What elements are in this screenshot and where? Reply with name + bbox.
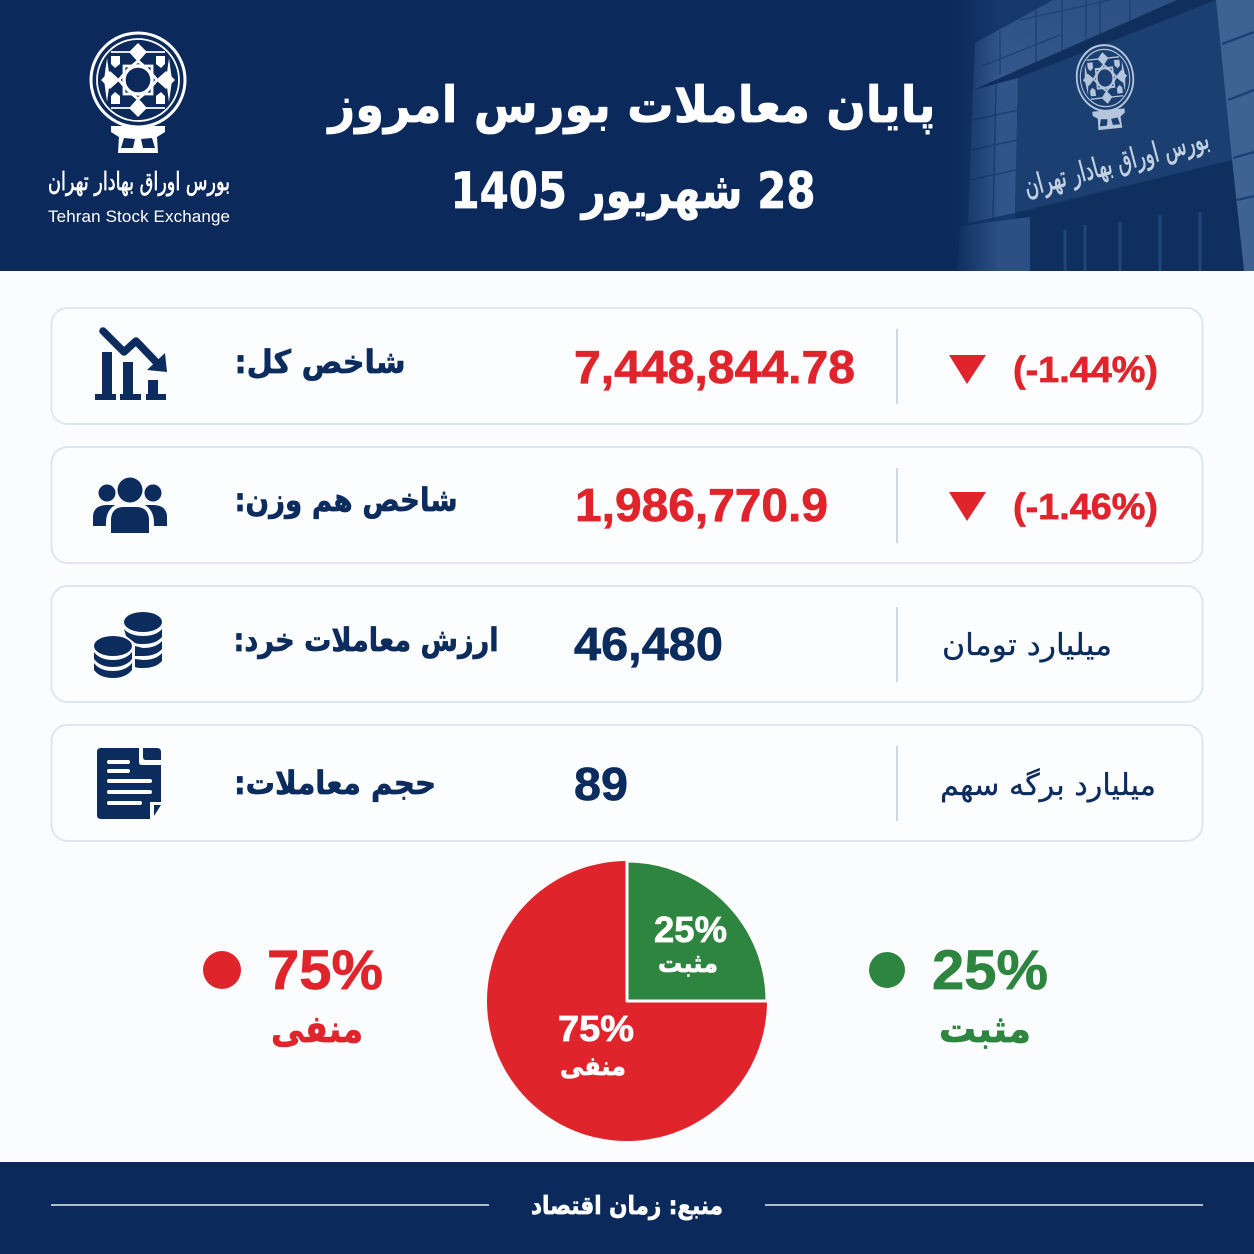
row: trade volume <box>52 725 1202 841</box>
row: retail trade value <box>52 586 1202 702</box>
value: 46,480 <box>574 618 723 670</box>
pie label negative: 75% <box>558 1008 634 1049</box>
pie label positive: 25% <box>654 909 727 950</box>
legend: negative: منفی <box>271 1007 363 1051</box>
pie label positive <box>654 909 727 979</box>
icon: document <box>97 748 161 819</box>
building sign logo <box>1074 42 1138 132</box>
legend: positive: مثبت <box>939 1007 1031 1051</box>
legend: positive <box>869 938 1048 1051</box>
label: حجم معاملات: <box>234 764 436 802</box>
pie label negative <box>558 1008 634 1082</box>
logo: Tehran Stock Exchange: بورس اوراق بهادار تهران <box>48 167 230 197</box>
legend: negative: 75% <box>267 938 383 1001</box>
change percent: (-1.46%) <box>1013 486 1158 527</box>
legend: positive: 25% <box>932 938 1048 1001</box>
down triangle <box>949 492 986 521</box>
title: پایان معاملات بورس امروز <box>326 76 936 135</box>
logo: Tehran Stock Exchange <box>48 33 230 226</box>
pie label positive: مثبت <box>658 949 718 979</box>
title: 28 شهریور 1405 <box>451 162 816 221</box>
label: شاخص کل: <box>234 343 406 381</box>
header band <box>0 0 1254 271</box>
row: total index <box>52 308 1202 424</box>
logo: Tehran Stock Exchange: Tehran Stock Exchange <box>48 207 230 226</box>
building photo <box>950 0 1254 271</box>
unit: میلیارد برگه سهم <box>940 768 1156 803</box>
row: equal weight index <box>52 447 1202 563</box>
value: 1,986,770.9 <box>575 479 828 531</box>
source: منبع: زمان اقتصاد <box>531 1191 723 1221</box>
footer band <box>0 1162 1254 1254</box>
icon: coins <box>94 612 162 678</box>
icon: falling chart <box>95 331 167 400</box>
unit: میلیارد تومان <box>942 628 1112 663</box>
down triangle <box>949 355 986 384</box>
pie label negative: منفی <box>560 1052 626 1082</box>
change percent: (-1.44%) <box>1013 349 1158 390</box>
pie chart <box>487 861 767 1141</box>
value: 7,448,844.78 <box>574 341 855 393</box>
label: شاخص هم وزن: <box>234 481 458 519</box>
legend: negative <box>203 938 383 1051</box>
icon: people <box>93 478 167 533</box>
label: ارزش معاملات خرد: <box>234 621 498 659</box>
value: 89 <box>574 758 628 810</box>
title <box>326 76 936 221</box>
